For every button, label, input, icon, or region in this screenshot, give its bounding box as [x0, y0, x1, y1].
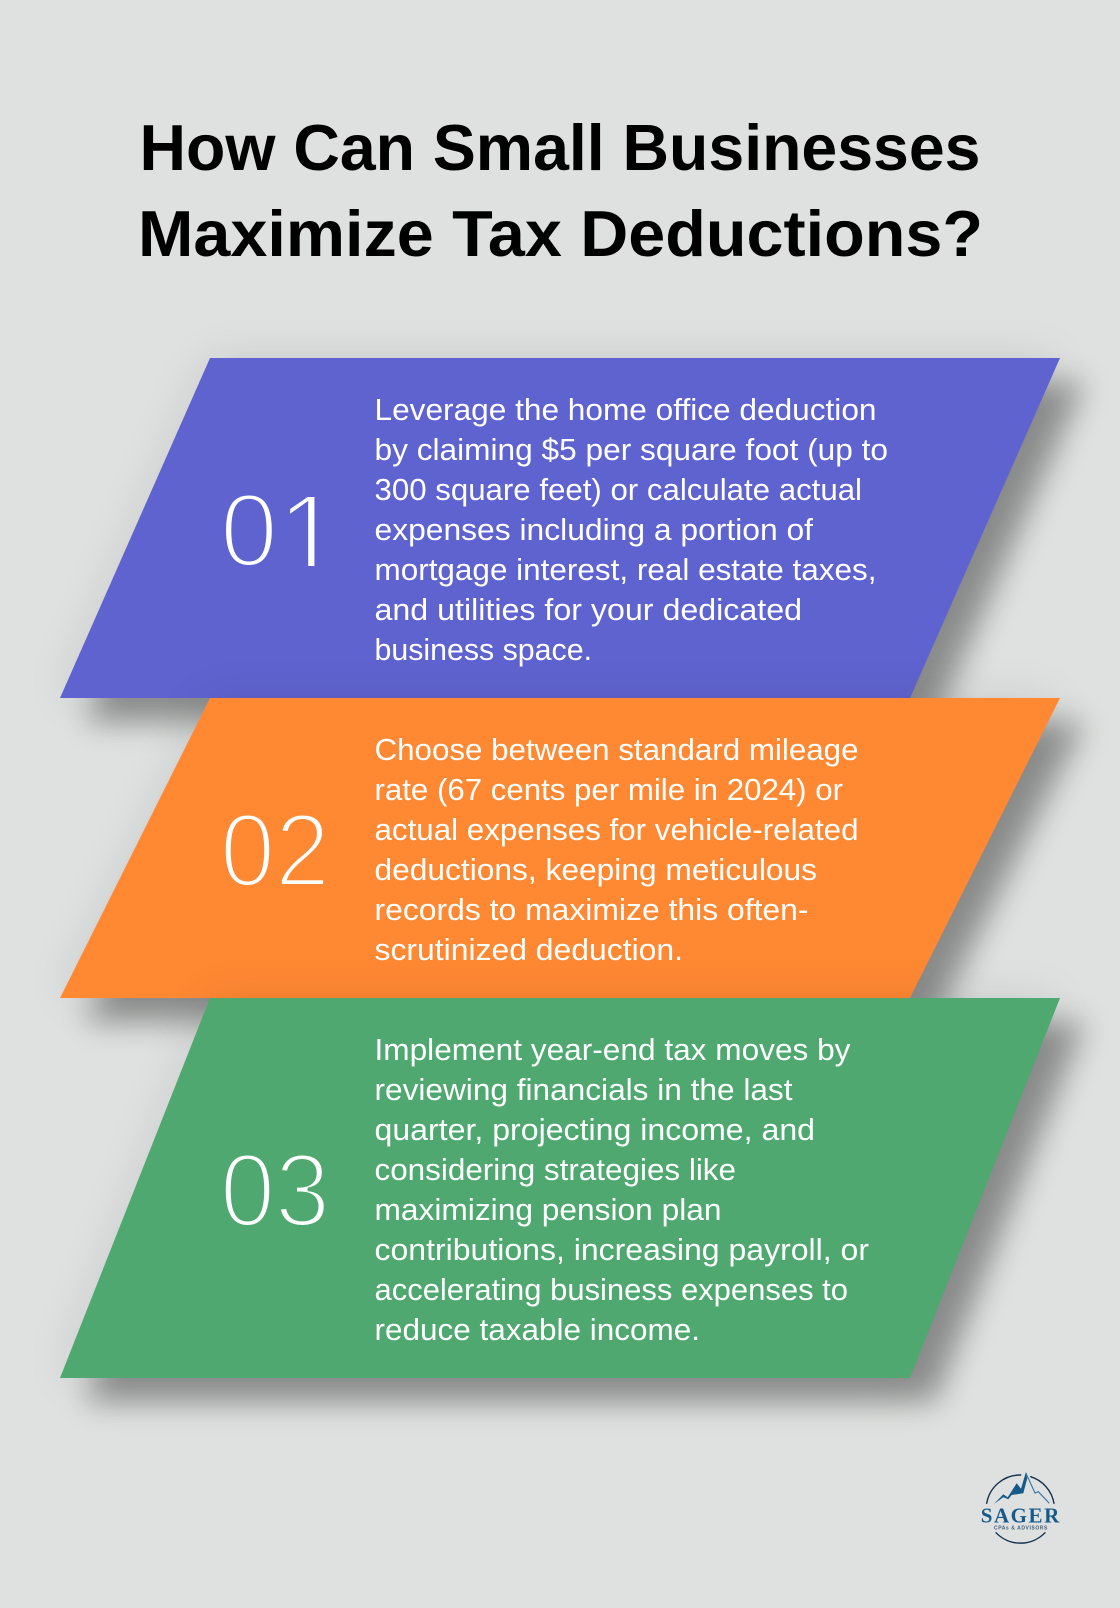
- text block: step 03: considering strategies like: [374, 1153, 736, 1187]
- text block: step 03: maximizing pension plan: [374, 1193, 722, 1227]
- text block: step 02: deductions, keeping meticulous: [374, 853, 817, 887]
- text block: step 01: business space.: [374, 633, 592, 667]
- panel shape: green parallelogram: [60, 998, 1060, 1378]
- text block: step 03: accelerating business expenses to: [374, 1273, 848, 1307]
- text block: step 03: [374, 1033, 869, 1347]
- text block: step 01: [374, 393, 888, 667]
- text block: step 01: expenses including a portion of: [374, 513, 814, 547]
- panel shape: orange parallelogram: [60, 698, 1060, 998]
- icon: mountain peaks: [994, 1473, 1049, 1504]
- number 01: 0: [220, 473, 278, 589]
- text block: step 02: records to maximize this often-: [374, 893, 808, 927]
- text block: step 02: actual expenses for vehicle-related: [374, 813, 858, 847]
- logo wordmark: SAGER: [981, 1504, 1060, 1528]
- panel shape: purple parallelogram: [60, 358, 1060, 698]
- text block: step 02: rate (67 cents per mile in 2024) or: [374, 773, 843, 807]
- title: How Can Small Businesses: [140, 111, 980, 184]
- panel: step 02 vehicle deductions: [60, 698, 1060, 998]
- title: [138, 111, 983, 270]
- text block: step 03: reviewing financials in the last: [374, 1073, 793, 1107]
- text block: step 01: mortgage interest, real estate taxes,: [374, 553, 876, 587]
- text block: step 02: scrutinized deduction.: [374, 933, 683, 967]
- text block: step 01: and utilities for your dedicated: [374, 593, 802, 627]
- text block: step 02: Choose between standard mileage: [374, 733, 858, 767]
- text block: step 01: 300 square feet) or calculate actual: [374, 473, 862, 507]
- text block: step 03: Implement year-end tax moves by: [374, 1033, 851, 1067]
- text block: step 01: by claiming $5 per square foot (up to: [374, 433, 888, 467]
- number 03: 03: [220, 1133, 330, 1249]
- logo: Sager CPAs & Advisors: [981, 1473, 1060, 1543]
- text block: step 01: Leverage the home office deduction: [374, 393, 876, 427]
- number 02: 02: [220, 793, 330, 909]
- panel: step 01 home office deduction: [60, 358, 1060, 698]
- text block: step 03: reduce taxable income.: [374, 1313, 700, 1347]
- text block: step 02: [374, 733, 858, 967]
- logo ring arcs: [987, 1475, 1054, 1543]
- logo tagline: CPAs & ADVISORS: [994, 1525, 1048, 1531]
- text block: step 03: quarter, projecting income, and: [374, 1113, 815, 1147]
- panel: step 03 year-end tax moves: [60, 998, 1060, 1378]
- text block: step 03: contributions, increasing payroll, or: [374, 1233, 869, 1267]
- number 01: 1: [277, 470, 342, 600]
- title: Maximize Tax Deductions?: [138, 197, 983, 270]
